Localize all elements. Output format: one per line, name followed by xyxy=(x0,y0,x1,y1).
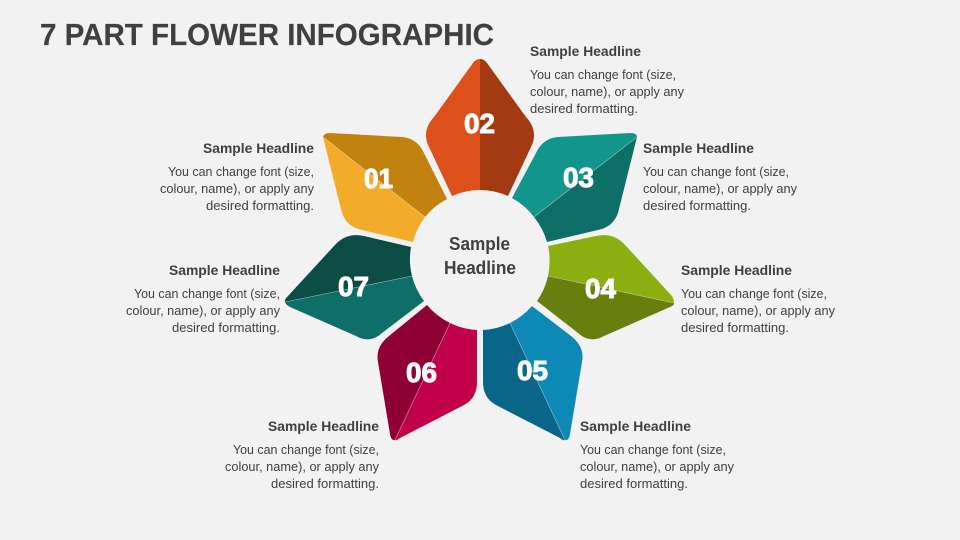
text block 04: Sample Headline xyxy=(681,262,792,278)
center label: Headline xyxy=(444,258,516,278)
petal 07 xyxy=(285,235,424,339)
text block 07: desired formatting. xyxy=(172,320,280,335)
title: 7 PART FLOWER INFOGRAPHIC xyxy=(40,17,494,52)
text block 04: desired formatting. xyxy=(681,320,789,335)
text block 03: colour, name), or apply any xyxy=(643,181,797,196)
flower diagram xyxy=(285,59,674,440)
petal 06 xyxy=(377,305,477,440)
text block 04: You can change font (size, xyxy=(681,286,827,301)
text block 01: You can change font (size, xyxy=(168,164,314,179)
text block 03: desired formatting. xyxy=(643,198,751,213)
text block 04: colour, name), or apply any xyxy=(681,303,835,318)
petal 04 xyxy=(537,235,674,339)
petal 06: 06 xyxy=(406,357,437,388)
petal 05: 05 xyxy=(517,355,548,386)
text block 05 xyxy=(580,418,734,491)
petal 04: 04 xyxy=(585,273,616,304)
text block 06 xyxy=(225,418,379,491)
petal 02: 02 xyxy=(464,108,495,139)
petal 01: 01 xyxy=(364,163,393,194)
petal 01 xyxy=(323,133,447,242)
text block 06: You can change font (size, xyxy=(233,442,379,457)
text block 03 xyxy=(643,140,797,213)
text block 02: You can change font (size, xyxy=(530,67,676,82)
center label xyxy=(444,234,516,278)
text block 05: colour, name), or apply any xyxy=(580,459,734,474)
text block 03: You can change font (size, xyxy=(643,164,789,179)
text block 06: desired formatting. xyxy=(271,476,379,491)
petal 05 xyxy=(483,306,583,440)
text block 01: Sample Headline xyxy=(203,140,314,156)
text block 06: Sample Headline xyxy=(268,418,379,434)
text block 01: desired formatting. xyxy=(206,198,314,213)
text block 01 xyxy=(160,140,314,213)
text block 07: Sample Headline xyxy=(169,262,280,278)
petal 07: 07 xyxy=(338,271,369,302)
petal 03 xyxy=(512,133,637,242)
text block 05: desired formatting. xyxy=(580,476,688,491)
text block 01: colour, name), or apply any xyxy=(160,181,314,196)
text block 02: colour, name), or apply any xyxy=(530,84,684,99)
center label: Sample xyxy=(449,234,510,254)
petal 02 xyxy=(426,59,534,196)
text block 04 xyxy=(681,262,835,335)
text block 02 xyxy=(530,43,684,116)
text block 03: Sample Headline xyxy=(643,140,754,156)
text block 07 xyxy=(126,262,280,335)
text block 06: colour, name), or apply any xyxy=(225,459,379,474)
text block 07: colour, name), or apply any xyxy=(126,303,280,318)
text block 02: desired formatting. xyxy=(530,101,638,116)
text block 02: Sample Headline xyxy=(530,43,641,59)
text block 05: You can change font (size, xyxy=(580,442,726,457)
text block 07: You can change font (size, xyxy=(134,286,280,301)
petal 03: 03 xyxy=(563,162,594,193)
text block 05: Sample Headline xyxy=(580,418,691,434)
